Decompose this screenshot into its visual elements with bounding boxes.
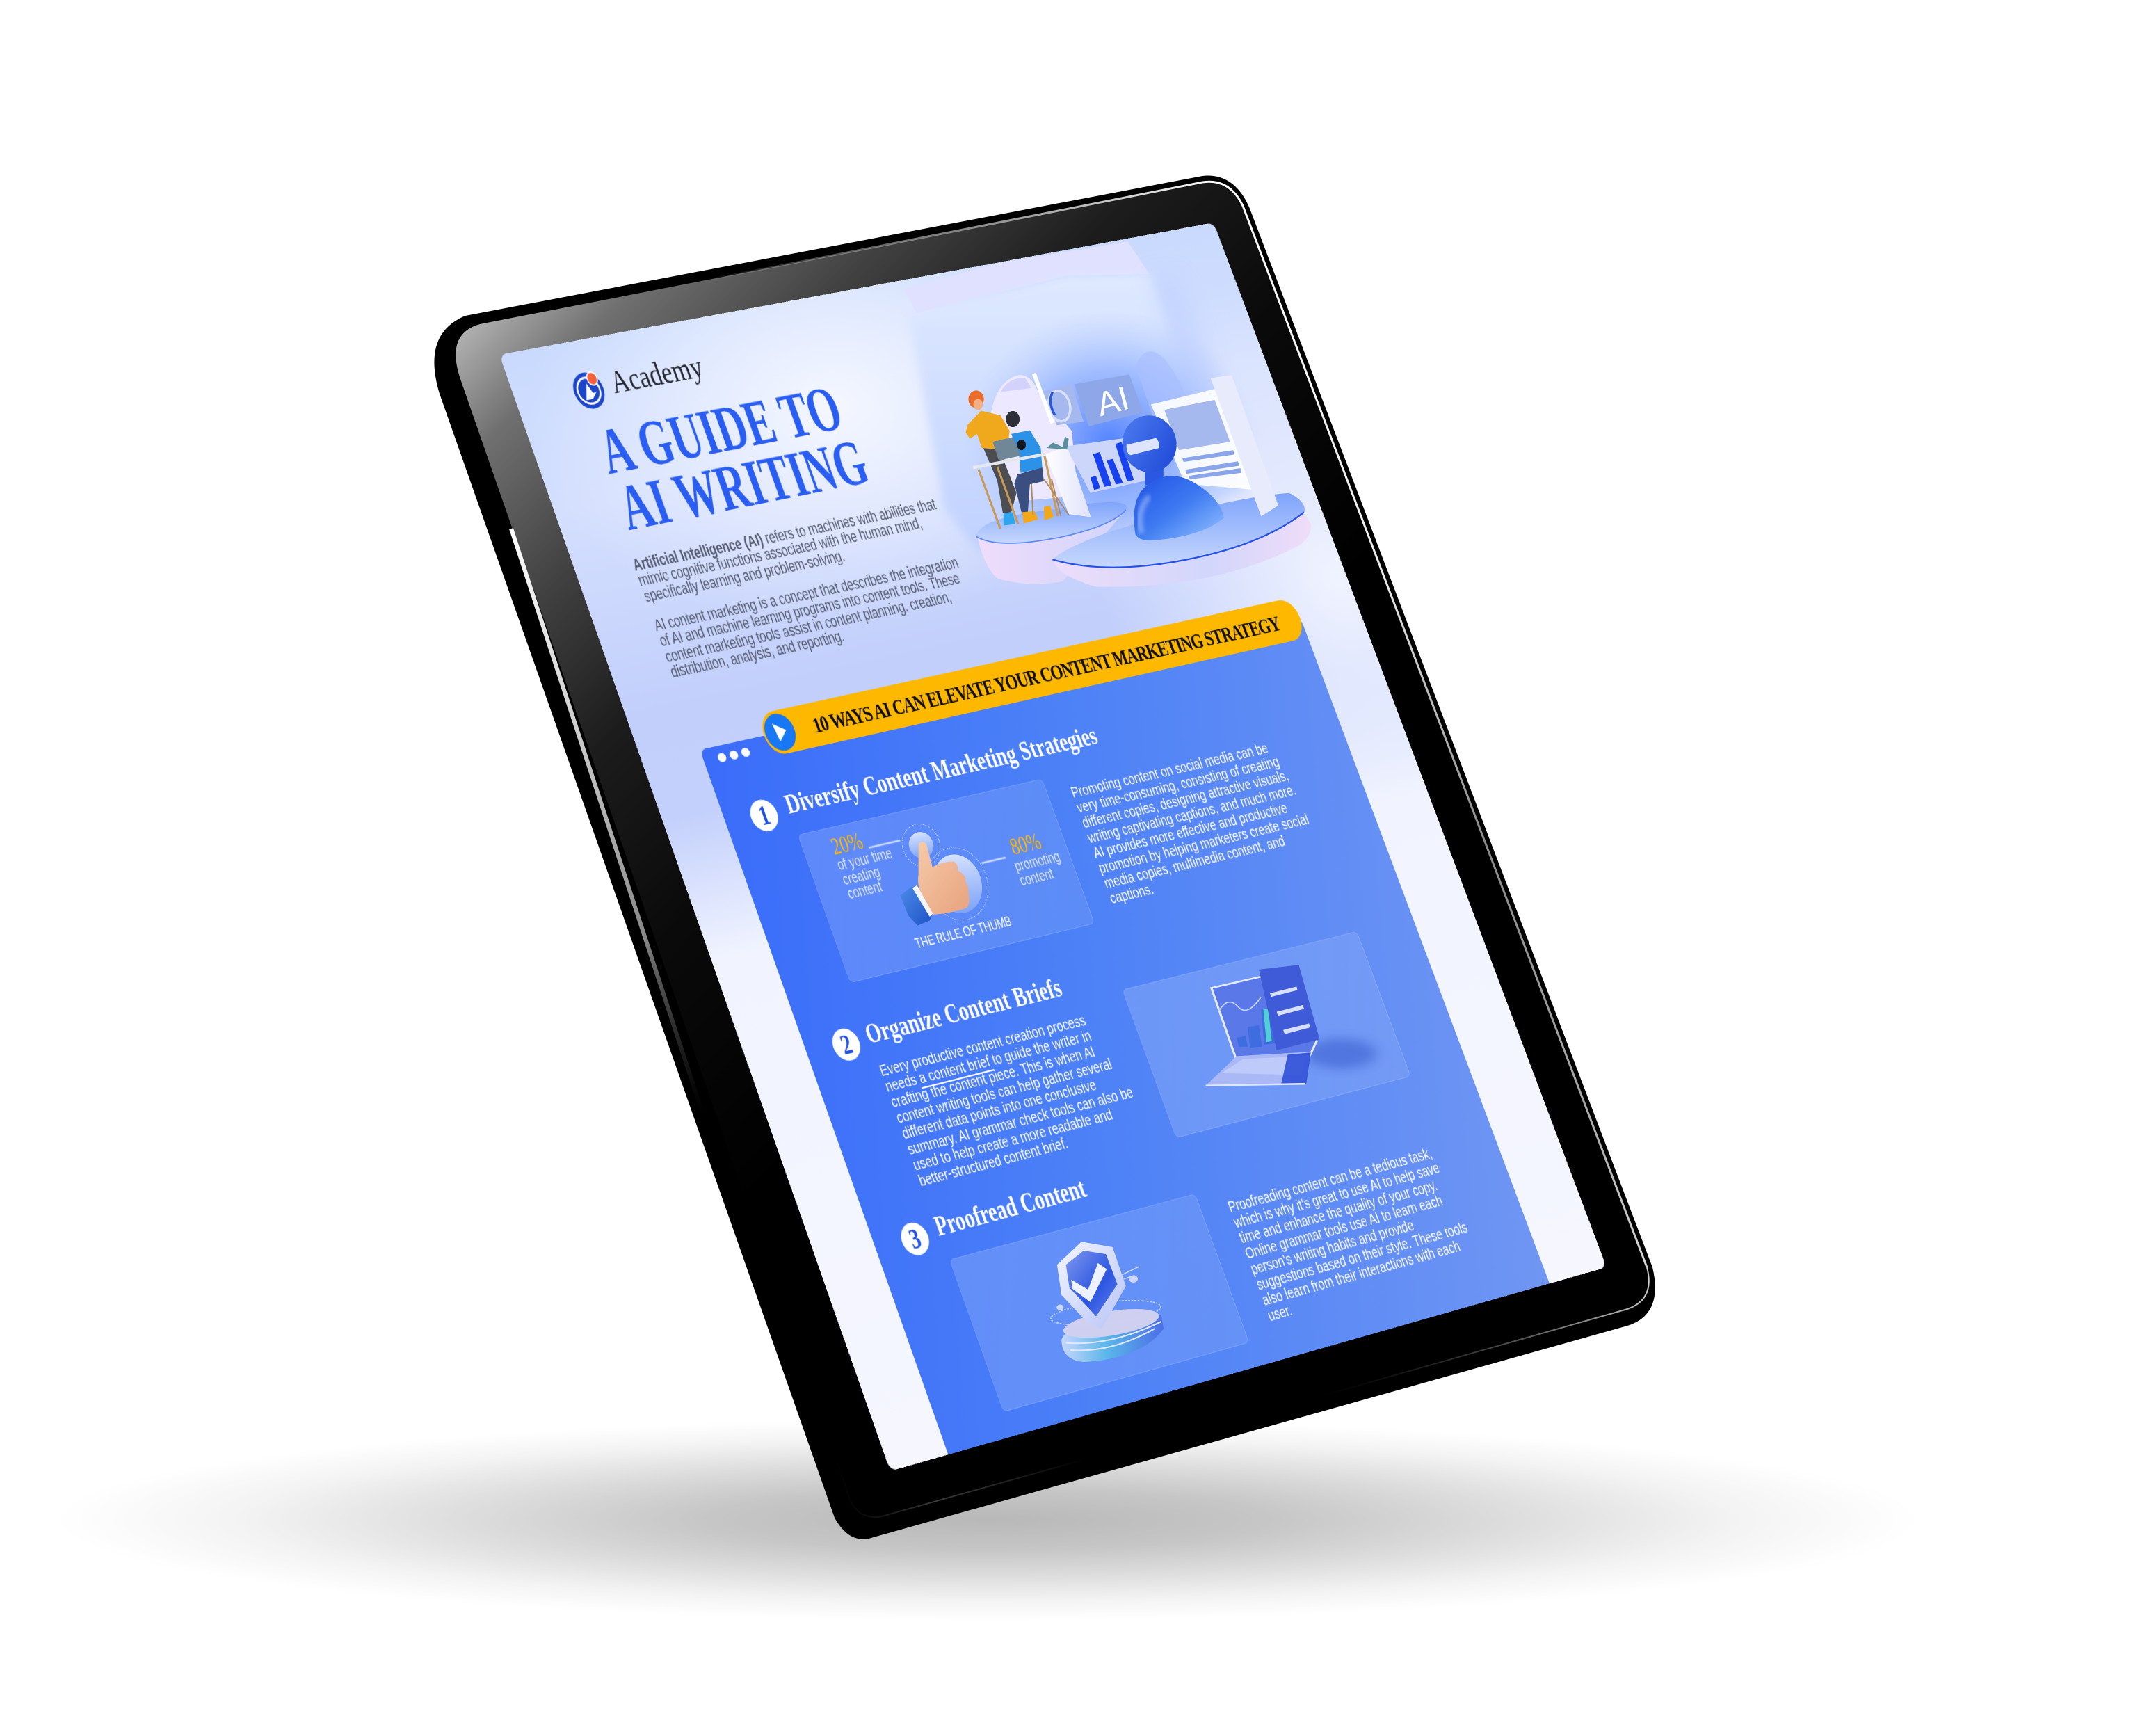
card: shield (949, 1194, 1249, 1412)
white side panel (1045, 447, 1091, 518)
hero 3D illustration (914, 241, 1311, 587)
section 3 body: suggestions based on their style. These tools (1254, 1219, 1470, 1294)
title: AI WRITING (609, 427, 878, 545)
card: rule of thumb (798, 778, 1095, 983)
banner play icon (764, 713, 796, 753)
title: A GUIDE TO (590, 374, 851, 488)
section 1 body: captions. (1107, 881, 1156, 907)
section 1 body: different copies, designing attractive visuals, (1079, 767, 1291, 832)
content brief underline (922, 1069, 995, 1089)
section 2 body (877, 1011, 1136, 1190)
panel: ten ways (700, 618, 1550, 1454)
AI tile: AI (1093, 379, 1133, 424)
intro paragraph 1: specifically learning and problem-solving. (641, 547, 847, 605)
donut tile (1034, 374, 1084, 425)
stat 20% caption: creating (840, 864, 883, 888)
section 3 body: also learn from their interactions with each (1260, 1237, 1463, 1309)
section 2 body: summary. AI grammar check tools can also be (905, 1084, 1136, 1159)
section 1 body: very time-consuming, consisting of creating (1074, 753, 1282, 817)
intro paragraph 1: Artificial Intelligence (AI) refers to machines with abilities that (630, 496, 938, 575)
screen background (499, 223, 1607, 1471)
section 2 heading: Organize Content Briefs (861, 972, 1065, 1050)
section 2 body: better-structured content brief. (916, 1134, 1070, 1190)
section 2 body: used to help create a more readable and (910, 1106, 1115, 1174)
banner text: 10 WAYS AI CAN ELEVATE YOUR CONTENT MARKETING STRATEGY (809, 611, 1283, 738)
laptop and shield illustrations (1050, 965, 1380, 1362)
section 3 body (1225, 1145, 1470, 1325)
blue figure (1116, 409, 1224, 540)
section 3 body: Online grammar tools use AI to learn each (1243, 1192, 1445, 1262)
section 2 number: 2 (836, 1029, 856, 1061)
intro paragraph 2: distribution, analysis, and reporting. (668, 627, 846, 682)
section 1 body: AI provides more effective and productive (1091, 800, 1290, 862)
stat 80% caption: content (1017, 865, 1056, 889)
section 2 body: different data points into one conclusive (899, 1076, 1099, 1143)
stat 80% caption: promoting (1012, 849, 1063, 875)
stat 20% caption (835, 845, 894, 903)
intro paragraph 2: AI content marketing is a concept that describes the integration (652, 554, 960, 635)
intro paragraph 2: content marketing tools assist in content planning, creation, (662, 588, 954, 666)
left platform (976, 502, 1127, 584)
laptop (1206, 965, 1376, 1086)
section 3 body: person's writing habits and provide (1248, 1217, 1417, 1278)
section 3 body: user. (1265, 1301, 1294, 1325)
section 2 body: crafting the content piece. This is when AI (888, 1043, 1097, 1112)
stat 80% caption (1012, 849, 1063, 889)
stat 20% caption: of your time (835, 845, 894, 874)
section 2 number (828, 1026, 864, 1064)
section 1 number (746, 797, 782, 834)
section 3 number (896, 1220, 933, 1258)
section 3 number: 3 (905, 1223, 925, 1255)
thumb illustration (900, 824, 989, 925)
connector lines (868, 839, 1006, 865)
section 2 body: content writing tools can help gather several (894, 1055, 1114, 1127)
section 1 body: Promoting content on social media can be (1069, 740, 1271, 801)
intro paragraph 1: mimic cognitive functions associated with the human mind, (636, 515, 924, 590)
rim highlights (511, 182, 1649, 1517)
stat 20% caption: content (845, 878, 885, 903)
section 1 heading: Diversify Content Marketing Strategies (780, 721, 1102, 819)
shield on pedestal (1049, 1242, 1164, 1362)
section 2 body: Every productive content creation process (877, 1011, 1088, 1080)
rule of thumb caption: THE RULE OF THUMB (913, 914, 1013, 952)
document monitor (1151, 375, 1278, 516)
section 2 body: needs a content brief to guide the writer in (883, 1027, 1094, 1096)
logo wordmark: Academy (605, 348, 708, 401)
section 3 body: Proofreading content can be a tedious task, (1225, 1145, 1434, 1216)
section 3 heading: Proofread Content (930, 1173, 1090, 1242)
bar chart tile (1065, 438, 1152, 493)
card: laptop (1122, 931, 1411, 1138)
intro paragraph 2: of AI and machine learning programs into content tools. These (657, 570, 962, 650)
title (590, 374, 878, 545)
section 1 body: writing captivating captions, and much more. (1085, 782, 1298, 847)
section 1 number: 1 (754, 800, 774, 831)
section 1 body: promotion by helping marketers create social (1096, 811, 1311, 877)
stat 80%: 80% (1006, 828, 1045, 860)
section 1 body: media copies, multimedia content, and (1102, 833, 1287, 892)
tablet outer shell (434, 176, 1655, 1539)
back walls (904, 241, 1255, 570)
bezel glass face (456, 183, 1647, 1517)
right platform (1052, 493, 1311, 587)
stat 20%: 20% (827, 828, 867, 860)
people at desk (965, 390, 1069, 529)
section 3 body: which is why it's great to use AI to help save (1231, 1160, 1442, 1232)
window dots (717, 747, 750, 762)
logo icon (572, 371, 605, 409)
screen content (572, 348, 1550, 1455)
banner (757, 597, 1308, 757)
section 3 body: time and enhance the quality of your copy. (1237, 1177, 1440, 1247)
section 1 body (1069, 740, 1311, 907)
intro paragraph 2 (652, 554, 962, 682)
AI tile (1075, 374, 1143, 426)
